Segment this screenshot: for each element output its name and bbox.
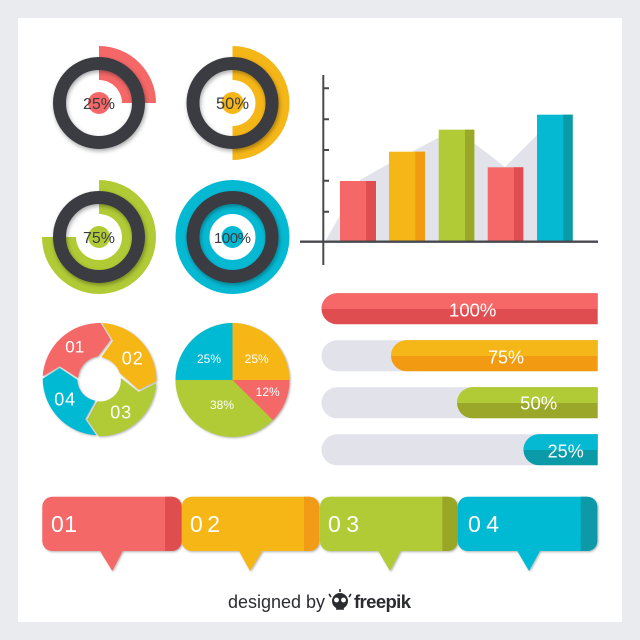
callout 01 [42, 497, 182, 571]
ring gauge: 50%: 50% [216, 95, 249, 113]
cycle labels: 01 [65, 338, 84, 356]
callout 03 [320, 497, 458, 571]
callout 02 [182, 497, 319, 571]
progress bar: 50%: 50% [520, 392, 557, 414]
grey area behind bars [325, 135, 537, 242]
pie labels: 12% [256, 385, 280, 399]
ring gauge: 25%: 25% [83, 96, 115, 113]
credit: designed by freepik [228, 589, 412, 612]
pie labels: 38% [210, 398, 234, 412]
axes [300, 75, 598, 265]
cycle labels: 04 [54, 390, 75, 410]
pie labels: 25% [197, 352, 221, 366]
progress bar: 50% [322, 387, 598, 418]
callout 03: 03 [328, 511, 359, 537]
arrow segment 01 [43, 323, 111, 378]
ring gauge: 50% [193, 46, 290, 160]
progress bar: 100% [321, 293, 598, 324]
icon: freepik mascot [329, 589, 351, 609]
callout 01: 01 [51, 511, 77, 537]
progress bar: 75%: 75% [488, 348, 524, 368]
arrow segment 04 [43, 368, 96, 435]
pie chart [176, 323, 290, 437]
pie labels [197, 352, 280, 412]
progress bar: 25%: 25% [548, 442, 584, 462]
callout 04 [458, 497, 597, 571]
cycle diagram: four arrows [43, 323, 156, 436]
ring gauge: 100% [192, 197, 272, 277]
credit: designed by freepik: designed by [228, 592, 325, 612]
arrow segment 03 [87, 378, 156, 436]
credit: designed by freepik: freepik [354, 591, 412, 612]
ring gauge: 100%: 100% [214, 230, 251, 247]
progress bar: 25% [322, 434, 598, 465]
cycle labels [54, 338, 143, 422]
pie labels: 25% [245, 352, 269, 366]
progress bar: 100%: 100% [449, 300, 496, 320]
ring gauge: 75%: 75% [83, 230, 115, 247]
cycle labels: 03 [110, 402, 131, 422]
arrow segment 02 [101, 323, 156, 390]
callout 02: 02 [190, 511, 220, 537]
progress bar: 75% [322, 340, 598, 371]
bar chart [300, 75, 598, 265]
cycle labels: 02 [122, 348, 143, 368]
callout 04: 04 [468, 511, 499, 537]
ring gauge: 75% [42, 180, 156, 294]
ring gauge: 25% [60, 46, 156, 142]
bars [340, 115, 573, 241]
